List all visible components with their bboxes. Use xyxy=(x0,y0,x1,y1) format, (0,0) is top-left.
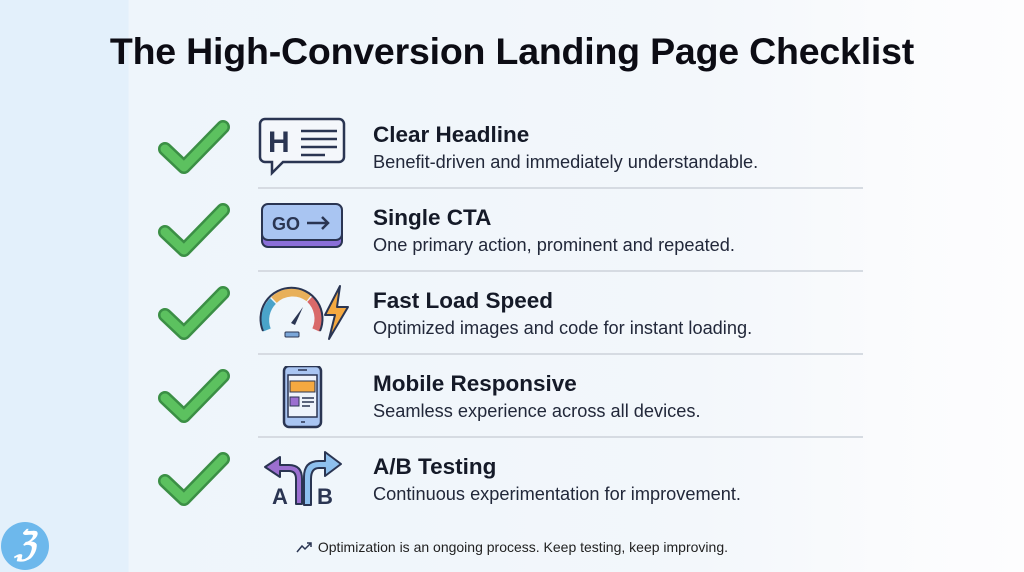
title: The High-Conversion Landing Page Checklist xyxy=(110,30,914,72)
row: a/b testing xyxy=(158,451,741,509)
icon: phone xyxy=(282,366,322,428)
row: fast load speed: Fast Load Speed xyxy=(373,288,553,313)
row: single cta xyxy=(158,203,735,257)
row: clear headline xyxy=(158,118,758,176)
logo badge xyxy=(1,522,49,570)
row: clear headline: Benefit-driven and immediately understandable. xyxy=(373,152,758,172)
icon: go button: GO xyxy=(272,214,300,234)
logo badge: ℨ xyxy=(15,527,35,564)
row: fast load speed xyxy=(158,285,752,340)
row: mobile responsive: Mobile Responsive xyxy=(373,371,577,396)
icon: split arrows: B xyxy=(317,484,333,509)
icon: go button xyxy=(261,203,343,248)
icon: speedometer xyxy=(260,285,349,340)
icon: headline bubble: H xyxy=(268,126,290,159)
row: a/b testing: A/B Testing xyxy=(373,454,496,479)
icon: split arrows xyxy=(264,451,342,509)
row: single cta: Single CTA xyxy=(373,205,491,230)
footer note: Optimization is an ongoing process. Keep testing, keep improving. xyxy=(318,539,728,555)
row: single cta: One primary action, prominent and repeated. xyxy=(373,235,735,255)
row: mobile responsive xyxy=(158,366,701,428)
text: Clear Headline xyxy=(373,122,529,147)
icon: check xyxy=(158,120,230,174)
row: mobile responsive: Seamless experience across all devices. xyxy=(373,401,701,421)
icon: headline bubble xyxy=(258,118,346,176)
icon: split arrows: A xyxy=(272,484,288,509)
row: a/b testing: Continuous experimentation for improvement. xyxy=(373,484,741,504)
row: fast load speed: Optimized images and code for instant loading. xyxy=(373,318,752,338)
